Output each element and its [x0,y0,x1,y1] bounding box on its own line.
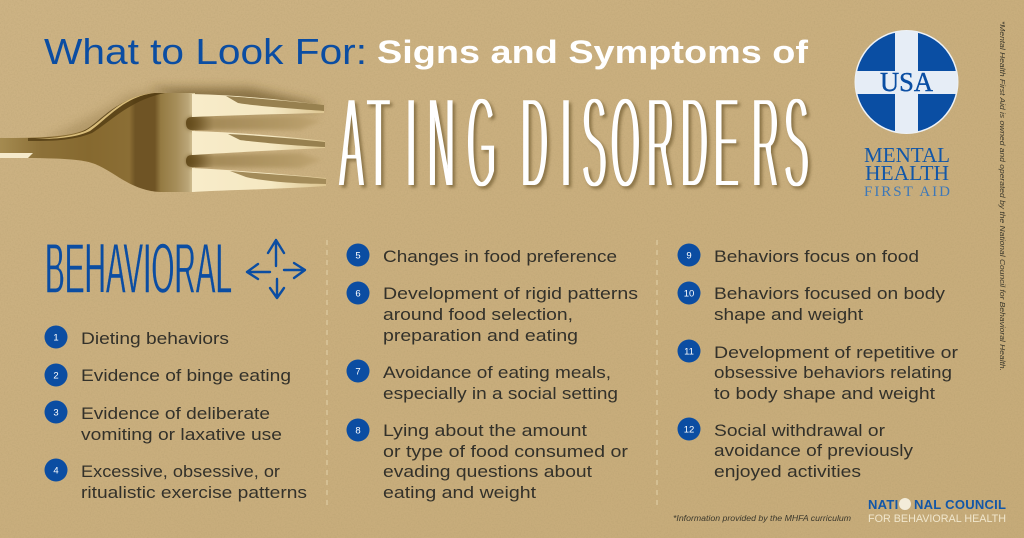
item 8: evading questions about [383,462,592,481]
list column 3 [678,244,958,481]
item 12: Social withdrawal or [714,421,885,440]
list column 1 [44,326,307,502]
logo: National Council for Behavioral Health [868,497,1006,525]
logo wordmark: HEALTH [865,161,949,185]
item 8: eating and weight [383,483,536,502]
item 2: 2 [53,370,59,382]
side note: ownership: *Mental Health First Aid is owned and operated by the National Council for Behavioral Health. [998,21,1007,371]
logo roundel: USA [880,67,933,97]
item 10 [678,282,946,324]
text: BEHAVIORAL [45,230,232,309]
item 11: Development of repetitive or [714,343,958,362]
item 8 [346,418,628,502]
item 10: Behaviors focused on body [714,284,946,303]
item 11: 11 [684,346,694,358]
item 12 [678,418,914,481]
item 9: Behaviors focus on food [714,247,919,266]
item 4: 4 [53,466,59,476]
item 5 [346,244,617,266]
logo: National Council for Behavioral Health: FOR BEHAVIORAL HEALTH [868,513,1006,525]
item 6 [346,282,638,345]
item 4: ritualistic exercise patterns [81,483,307,502]
list column 2 [346,244,638,502]
item 3 [44,400,282,444]
heading: what to look for: What to Look For: [44,31,367,72]
item 5: 5 [355,250,361,262]
logo: Mental Health First Aid USA [853,28,961,200]
item 8: or type of food consumed or [383,442,628,461]
item 10: 10 [684,288,694,300]
item 8: Lying about the amount [383,421,587,440]
logo wordmark [864,143,950,200]
item 11: obsessive behaviors relating [714,363,952,382]
item 3: vomiting or laxative use [81,425,282,444]
item 6: 6 [355,288,361,300]
item 3: 3 [53,408,59,418]
item 1: Dieting behaviors [81,329,229,348]
item 7: 7 [355,366,361,378]
item 9: 9 [686,250,692,262]
item 7: especially in a social setting [383,384,618,403]
heading: signs and symptoms of: Signs and Symptoms of [377,34,808,70]
item 12: 12 [684,424,694,436]
item 12: avoidance of previously [714,441,914,460]
item 8: 8 [355,426,361,436]
item 2 [44,364,291,386]
item 9 [678,244,919,266]
item 5: Changes in food preference [383,247,617,266]
item 7 [346,360,618,403]
icon: four-way arrows [247,240,305,298]
item 11: to body shape and weight [714,384,935,403]
item 1 [44,326,229,348]
title: eating disorders: ATING DISORDERS [339,68,809,217]
fork illustration [0,88,326,192]
logo: National Council for Behavioral Health: NATI NAL COUNCIL [868,497,1006,512]
item 6: Development of rigid patterns [383,284,638,303]
item 4: Excessive, obsessive, or [81,462,280,481]
item 10: shape and weight [714,305,863,324]
item 7: Avoidance of eating meals, [383,363,611,382]
item 1: 1 [53,332,59,344]
item 6: around food selection, [383,305,573,324]
logo wordmark: FIRST AID [864,184,950,200]
item 4 [44,458,307,502]
footnote: *Information provided by the MHFA curriculum [673,514,851,523]
logo roundel [853,28,961,136]
item 12: enjoyed activities [714,462,861,481]
item 3: Evidence of deliberate [81,404,270,423]
item 6: preparation and eating [383,326,578,345]
item 2: Evidence of binge eating [81,366,291,385]
item 11 [678,340,958,403]
logo wordmark: MENTAL [864,143,950,167]
